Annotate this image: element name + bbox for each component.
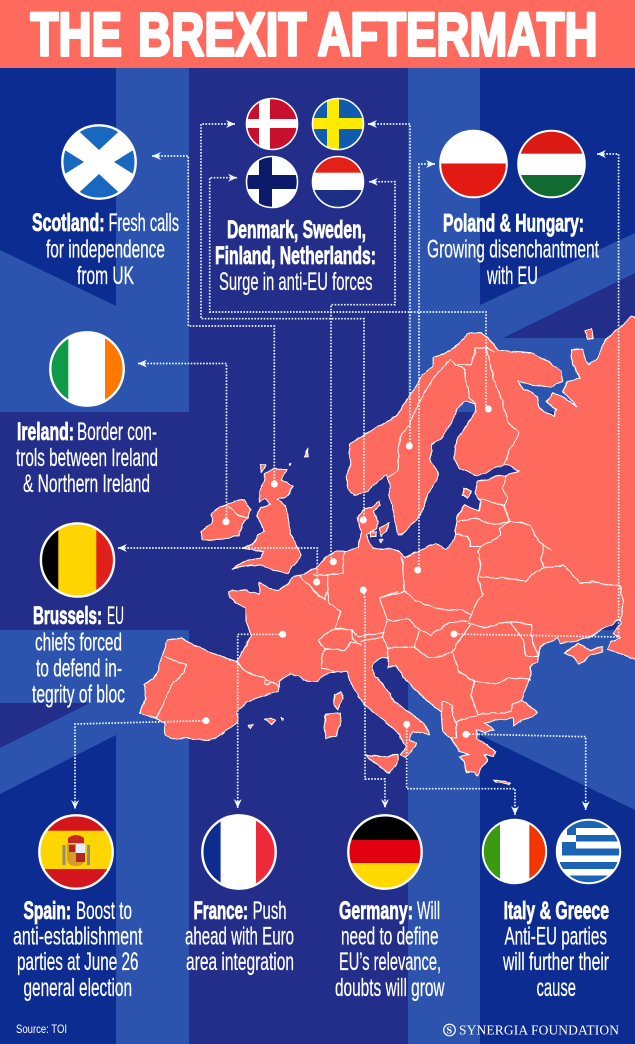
text: Ireland: Border con- (77, 418, 157, 446)
text: Denmark, Sweden, Finland, Netherlands (215, 216, 376, 296)
icon: Germany flag (346, 813, 424, 891)
icon: Sweden flag (311, 97, 365, 151)
text: Denmark, Sweden, Finland, Netherlands: Surge in anti-EU forces (219, 268, 372, 296)
text: Scotland: from UK (77, 262, 134, 290)
title: BREXIT (138, 0, 306, 68)
text: Germany: Germany: (339, 897, 413, 925)
text: Italy and Greece (502, 897, 609, 1002)
text: Spain: parties at June 26 (17, 948, 138, 976)
country borders (156, 348, 624, 738)
panel: Germany (335, 813, 445, 1002)
text: Brussels: chiefs forced (35, 628, 122, 656)
icon: Denmark flag (245, 97, 299, 151)
icon: Hungary flag (516, 130, 588, 199)
panel: Spain (13, 813, 143, 1002)
text: Germany: doubts will grow (335, 974, 445, 1002)
icon: Finland flag (245, 155, 299, 209)
source credit: Source: TOI (16, 1022, 67, 1036)
icon: Belgium flag (39, 521, 116, 599)
icon: Greece flag (555, 818, 623, 886)
panel: Poland and Hungary (427, 130, 599, 290)
panel: Italy and Greece (481, 818, 623, 1002)
text: Poland and Hungary: with EU (486, 262, 538, 290)
text: Scotland: Scotland: (32, 209, 104, 237)
text: Brussels: tegrity of bloc (32, 680, 125, 708)
mainland Europe (139, 316, 635, 776)
Ireland (201, 500, 251, 540)
footer logo: Synergia Foundation: S (446, 1026, 452, 1036)
text: France: France: (194, 897, 248, 925)
icon: Ireland flag (48, 330, 127, 408)
text: Italy and Greece: cause (536, 974, 576, 1002)
title banner (0, 0, 635, 68)
panel: France (185, 813, 294, 976)
text: Poland and Hungary (427, 210, 599, 290)
text: Germany (335, 897, 445, 1002)
title (30, 0, 598, 68)
icon: France flag (200, 813, 278, 891)
panel: Brussels (32, 521, 125, 708)
icon: Netherlands flag (311, 155, 365, 210)
text: France: Push (253, 897, 287, 925)
text: Germany: Will (417, 897, 440, 925)
text: Ireland: & Northern Ireland (23, 470, 150, 498)
text: Ireland: trols between Ireland (16, 444, 158, 472)
Andorra (265, 680, 270, 685)
text: Brussels (32, 602, 125, 708)
text: Spain: Spain: (24, 897, 71, 925)
text: Spain: anti-establishment (13, 922, 143, 950)
islands (248, 329, 603, 785)
text: Scotland: Fresh calls (108, 209, 179, 237)
text: Ireland (16, 418, 158, 498)
panel: Scotland (32, 123, 179, 290)
text: Spain: general election (24, 974, 132, 1002)
footer logo: Synergia Foundation: SYNERGIA FOUNDATION (459, 1022, 619, 1038)
text: Spain (13, 897, 143, 1002)
text: France (185, 897, 294, 976)
text: Brussels: to defend in- (36, 654, 122, 682)
text: Brussels: Brussels: (33, 602, 102, 630)
panel: Denmark, Sweden, Finland, Netherlands (215, 97, 376, 296)
map of Europe (139, 316, 635, 785)
text: Denmark, Sweden, Finland, Netherlands: Denmark, Sweden, (227, 216, 366, 244)
connector arrowheads (71, 120, 606, 815)
icon: Spain flag (37, 813, 115, 891)
text: France: ahead with Euro (185, 922, 294, 950)
text: Denmark, Sweden, Finland, Netherlands: Finland, Netherlands: (215, 242, 376, 270)
panel: Ireland (16, 330, 158, 498)
text: Germany: EU’s relevance, (339, 948, 441, 976)
text: Scotland: for independence (46, 236, 165, 264)
text: Ireland: Ireland: (17, 418, 74, 446)
text: Scotland (32, 209, 179, 290)
title: THE (30, 0, 122, 68)
map location dots (202, 406, 492, 738)
text: Germany: need to define (341, 922, 438, 950)
connector lines (75, 124, 619, 815)
icon: Poland flag (438, 130, 510, 200)
text: Brussels: EU (107, 602, 124, 630)
icon: Scotland flag (60, 123, 138, 201)
text: France: area integration (186, 948, 294, 976)
text: Spain: Boost to (76, 897, 132, 925)
Great Britain (233, 468, 301, 573)
icon: Italy flag (481, 818, 549, 886)
